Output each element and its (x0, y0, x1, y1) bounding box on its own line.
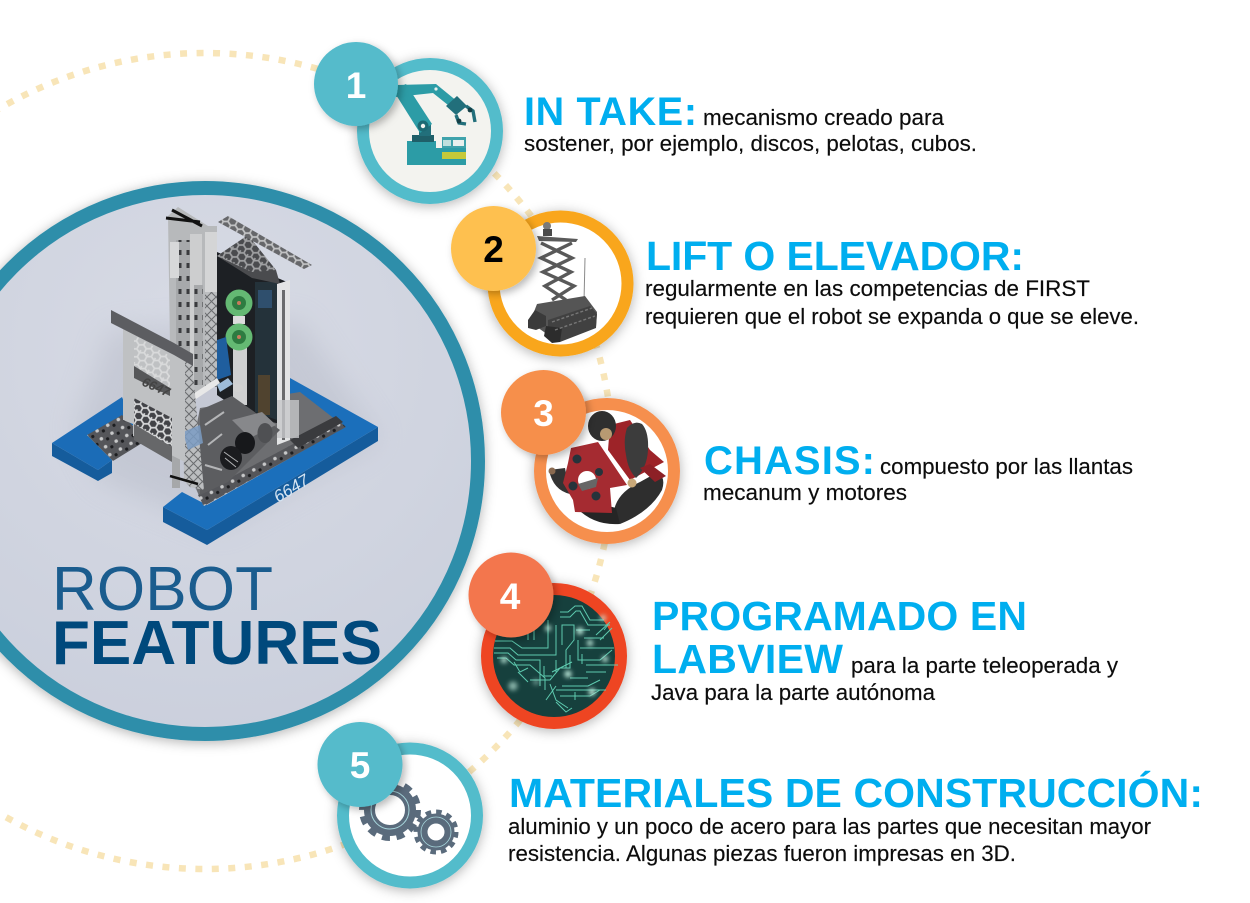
dotted orbit ring (0, 53, 613, 869)
badge: number 3 (501, 370, 586, 455)
right pillar (277, 280, 290, 445)
badge: number 3: 3 (533, 393, 554, 434)
robot soft shadow (75, 320, 380, 530)
panel: step 5 materials (318, 722, 1203, 882)
heading and text: materials: MATERIALES DE CONSTRUCCIÓN: (509, 770, 1203, 816)
heading and text: labview: LABVIEW (652, 636, 843, 682)
badge: number 1 (314, 42, 398, 126)
panel: step 2 lift (451, 206, 1139, 350)
green pulleys (226, 290, 252, 405)
blue rear element (217, 337, 231, 380)
circle: circuit brain icon (487, 589, 621, 723)
heading and text: in take: mecanismo creado para (703, 105, 945, 130)
chassis floor (188, 392, 345, 505)
title: robot features: FEATURES (52, 609, 382, 678)
heading and text: labview: PROGRAMADO EN (652, 593, 1027, 639)
icon: scissor lift (528, 222, 597, 343)
top hex plate (217, 235, 280, 284)
heading and text: labview (651, 593, 1119, 705)
back plate (217, 252, 287, 425)
icon: mecanum wheel (548, 411, 666, 524)
panel: step 3 chassis (501, 370, 1133, 538)
heading and text: lift: regularmente en las competencias de FIRST (645, 276, 1090, 301)
left flap panel: 6647 (140, 374, 173, 400)
icon: large gear (362, 782, 418, 838)
badge: number 5 (318, 722, 402, 807)
icon: circuit traces (494, 606, 618, 712)
panel: step 1 in take (314, 42, 977, 198)
heading and text: lift (645, 233, 1139, 329)
heading and text: lift: LIFT O ELEVADOR: (646, 233, 1024, 279)
title: robot features (52, 555, 382, 678)
icon: robot arm (393, 84, 475, 165)
panel: step 4 labview (468, 552, 1119, 723)
circle: scissor lift robot icon (494, 216, 628, 350)
circle: gears icon (343, 748, 477, 882)
heading and text: in take: sostener, por ejemplo, discos, pelotas, cubos. (524, 131, 977, 156)
panel: robot features main circle (0, 188, 478, 734)
heading and text: chassis: mecanum y motores (703, 480, 907, 505)
heading and text: lift: requieren que el robot se expanda o que se eleve. (645, 304, 1139, 329)
heading and text: chassis (703, 439, 1133, 505)
circle: mecanum wheel icon (540, 404, 674, 538)
heading and text: materials (508, 770, 1203, 866)
icon: small gear (416, 812, 456, 852)
heading and text: labview: Java para la parte autónoma (651, 680, 936, 705)
badge: number 2: 2 (483, 229, 504, 270)
badge: number 4: 4 (500, 576, 521, 617)
truss column (183, 352, 204, 490)
badge: number 5: 5 (350, 745, 370, 786)
heading and text: in take (524, 90, 977, 156)
heading and text: chassis: CHASIS: (704, 439, 875, 483)
heading and text: materials: resistencia. Algunas piezas fueron impresas en 3D. (508, 841, 1016, 866)
robot illustration (52, 207, 380, 545)
heading and text: materials: aluminio y un poco de acero para las partes que necesitan mayor (508, 814, 1152, 839)
lift tower (166, 207, 217, 400)
heading and text: chassis: compuesto por las llantas (880, 454, 1133, 479)
circle: robot arm icon (363, 64, 497, 198)
badge: number 4 (468, 552, 554, 638)
icon: circuit glow points (501, 615, 608, 696)
electronics and motors (187, 378, 280, 495)
frame number: 6647 (270, 470, 313, 506)
heading and text: labview: para la parte teleoperada y (851, 653, 1119, 678)
badge: number 2 (451, 206, 536, 291)
title: robot features: ROBOT (52, 555, 273, 624)
heading and text: in take: IN TAKE: (524, 90, 697, 134)
blue frame (52, 443, 112, 481)
badge: number 1: 1 (346, 65, 366, 106)
left flap panel (111, 310, 193, 462)
top angled bar (218, 216, 312, 269)
